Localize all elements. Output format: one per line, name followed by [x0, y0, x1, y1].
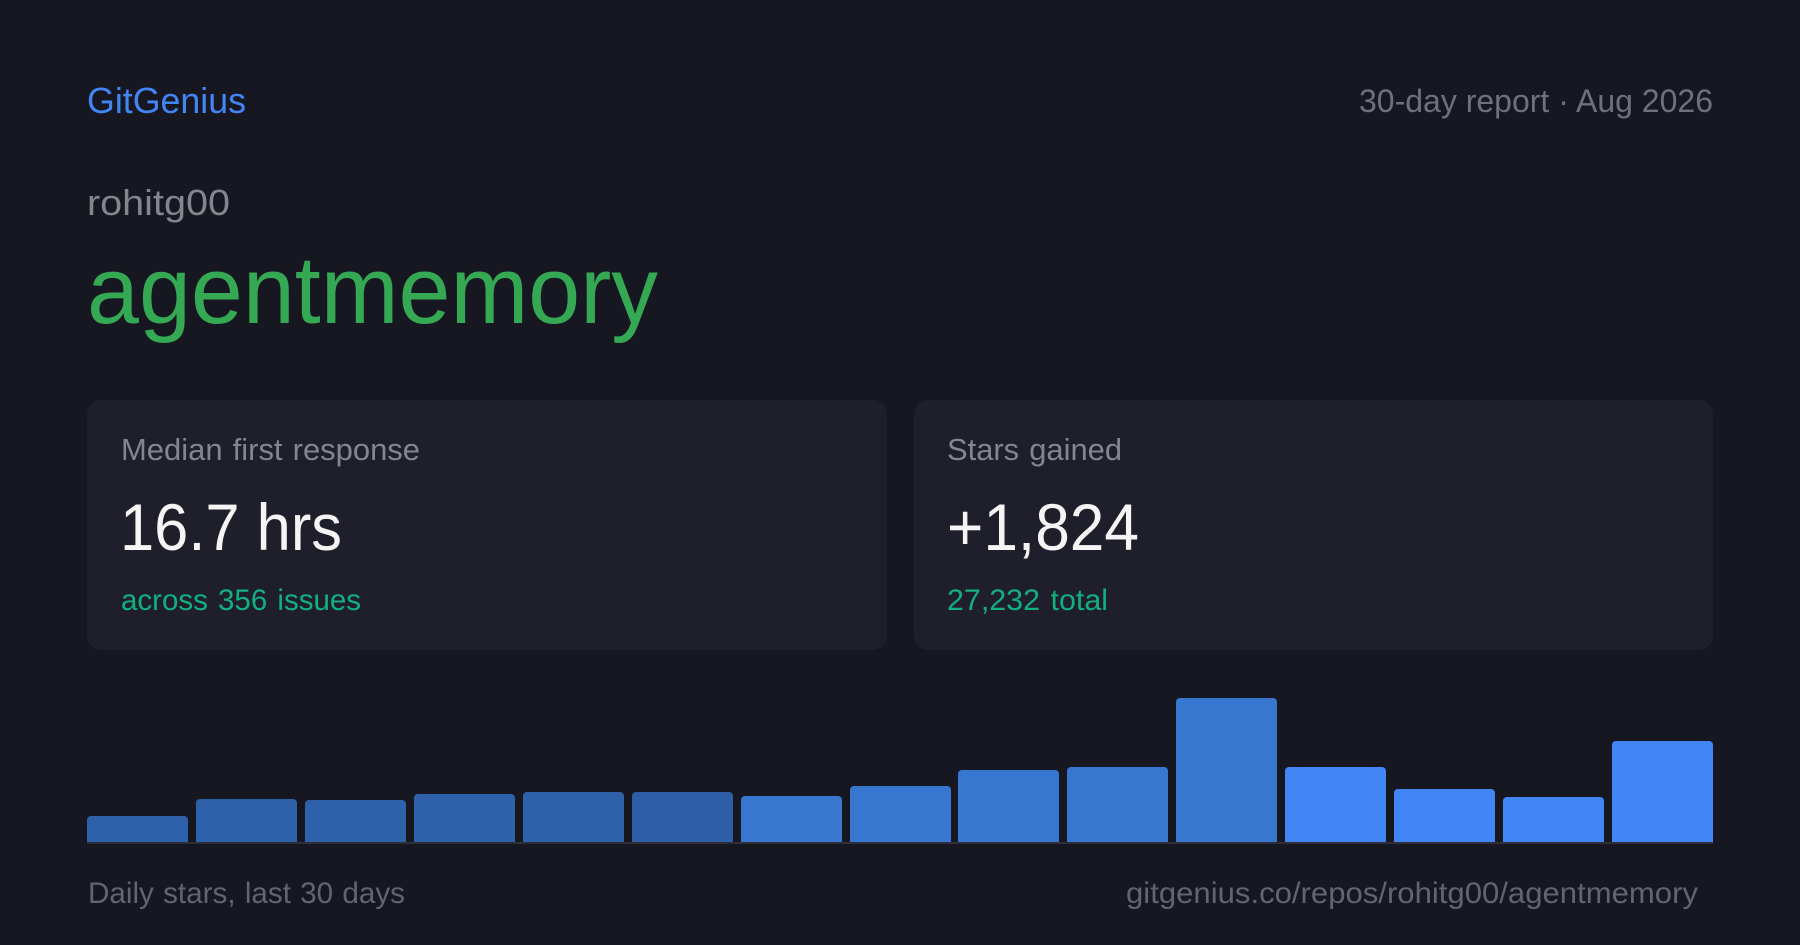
subtext: across 356 issues [121, 584, 361, 617]
title: repository name: agentmemory [87, 237, 658, 344]
subtext: 27,232 total [947, 584, 1108, 617]
repository url: gitgenius.co/repos/rohitg00/agentmemory [1126, 877, 1698, 910]
report period: 30-day report · Aug 2026 [1359, 83, 1713, 119]
label: Stars gained [947, 433, 1122, 467]
panel: stars gained [914, 400, 1713, 650]
label: Median first response [121, 433, 420, 467]
value: +1,824 [947, 490, 1139, 564]
repository owner: rohitg00 [87, 182, 230, 223]
brand name: GitGenius [87, 80, 246, 121]
chart caption: Daily stars, last 30 days [88, 877, 405, 910]
bar chart: daily stars [87, 698, 1713, 844]
panel: median first response [87, 400, 887, 650]
value: 16.7 hrs [120, 490, 342, 564]
